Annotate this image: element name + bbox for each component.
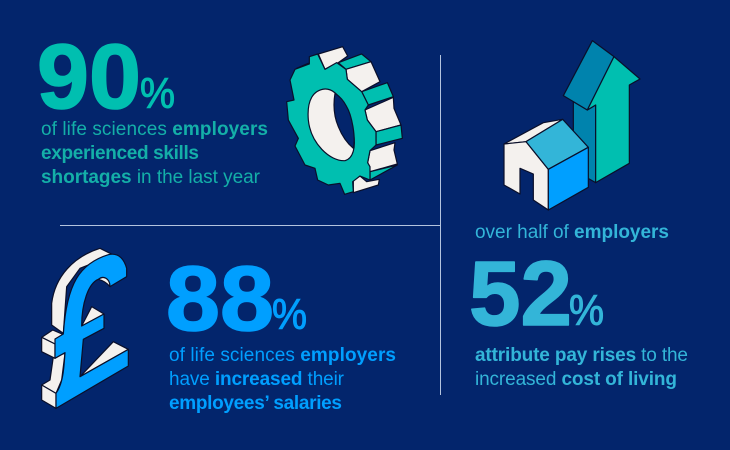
- panel: 88% salaries: [166, 248, 396, 414]
- panel: 52% pay rises: [469, 222, 688, 390]
- text: salaries description: have increased their: [169, 369, 345, 390]
- text: skills shortages description: shortages in the last year: [41, 167, 261, 188]
- stat: 52%: 52: [469, 243, 572, 345]
- text: over half of employers: over half of employers: [475, 222, 669, 243]
- text: skills shortages description: of life sciences employers: [41, 119, 268, 140]
- stat: 52%: %: [569, 287, 604, 335]
- text: pay rises description: increased cost of living: [475, 369, 677, 390]
- icon: pound sign: [42, 248, 128, 408]
- stat: 90%: %: [140, 70, 175, 118]
- text: salaries description: [169, 345, 396, 414]
- text: salaries description: of life sciences employers: [169, 345, 396, 366]
- panel: 90% skills shortages: [37, 26, 268, 188]
- icon: house and rising arrow: [504, 41, 640, 210]
- text: skills shortages description: [41, 119, 268, 188]
- text: salaries description: employees’ salaries: [169, 393, 342, 414]
- text: pay rises description: [475, 345, 688, 390]
- stat: 90%: 90: [37, 26, 141, 128]
- stat: 88%: 88: [166, 248, 274, 350]
- stat: 88%: %: [272, 291, 307, 339]
- text: skills shortages description: experienced skills: [41, 143, 199, 164]
- text: pay rises description: attribute pay rises to the: [475, 345, 688, 366]
- icon: gear: [287, 47, 402, 194]
